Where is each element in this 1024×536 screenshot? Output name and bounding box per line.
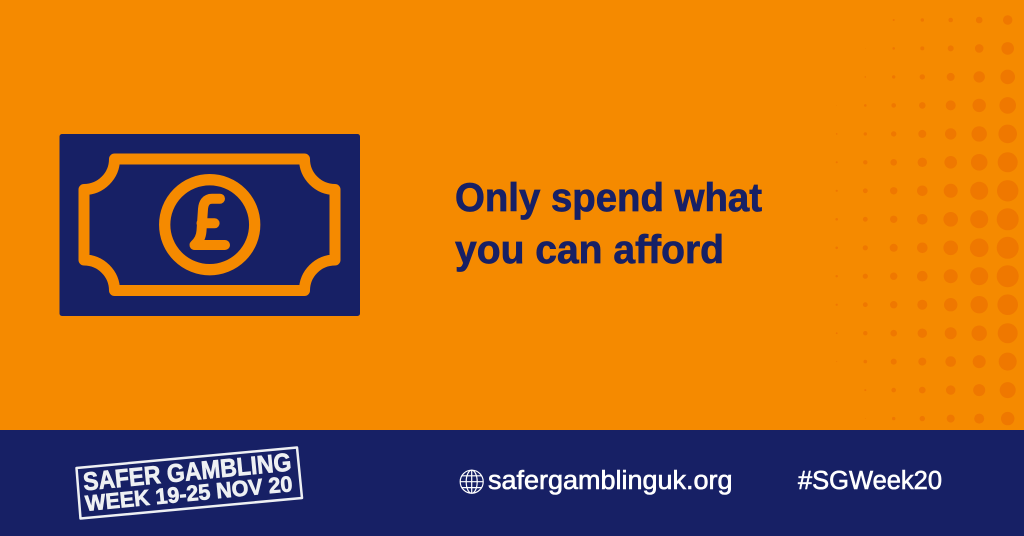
icon: globe	[460, 470, 483, 493]
hashtag: #SGWeek20	[798, 467, 942, 495]
banknote inner border	[84, 159, 335, 290]
banknote body	[60, 134, 360, 316]
panel: navy footer	[0, 430, 1024, 536]
headline line 1: Only spend what	[455, 176, 762, 220]
headline line 2: you can afford	[455, 228, 724, 272]
pound glyph	[194, 199, 225, 245]
stamp line 2: WEEK 19-25 NOV 20	[84, 471, 294, 516]
halftone dot pattern	[835, 15, 1019, 425]
stamp line 1: SAFER GAMBLING	[82, 449, 293, 496]
stamp logo: Safer Gambling Week	[76, 448, 302, 518]
coin circle	[165, 180, 255, 270]
headline	[455, 176, 762, 272]
icon: banknote with pound sign	[60, 134, 360, 316]
stamp border	[76, 448, 302, 518]
website address: safergamblinguk.org	[488, 467, 732, 495]
